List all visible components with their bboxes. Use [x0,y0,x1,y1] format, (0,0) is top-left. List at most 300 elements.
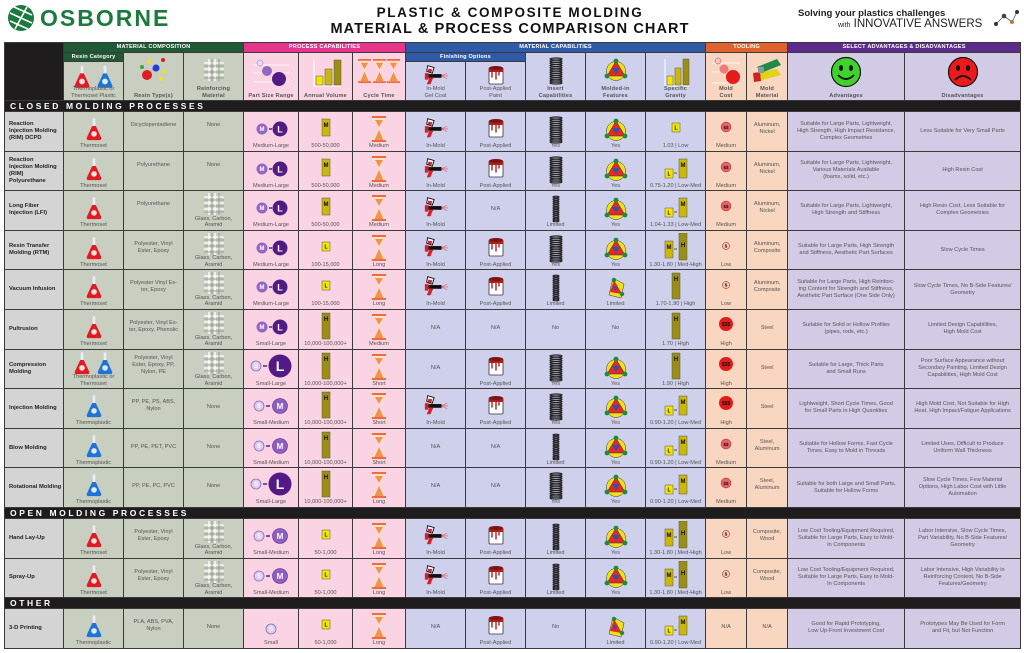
row: Spray-Up: Yes [611,590,620,596]
row: LFI: High Resin Cost, Less Suitable for [920,203,1005,209]
row: Blow Molding: Limited Uses, Difficult to Produce [921,441,1004,447]
row: Rotational Molding: Slow Cycle Times, Few Material [923,477,1002,483]
row: Vacuum Infusion: Medium-Large [253,301,289,307]
header band: Specific [664,86,687,92]
row: Spray-Up: Polyester, Vinyl [134,569,173,575]
row: Blow Molding: Yes [611,460,620,466]
row: 3-D Printing: No [552,624,559,630]
row: Pultrusion: Steel [761,325,773,331]
row: Compression Molding: Small-Large [256,381,286,387]
row: Pultrusion: Suitable for Solid or Hollow Profiles [802,322,890,328]
row: Rotational Molding: Rotational Molding [9,484,61,490]
row: Vacuum Infusion: Thermoset [80,301,107,307]
row: RTM: Medium-Large [253,262,289,268]
row: Blow Molding: 0.90-1.20 | Low-Med [650,460,701,466]
row: Blow Molding: Times, Easy to Mold in Threads [807,448,885,454]
row: RIM DCPD: Suitable for Large Parts, Lightweight, [800,121,892,127]
row: Vacuum Infusion: Geometry [950,290,975,296]
row: Vacuum Infusion: Aluminum, [754,280,780,286]
row: Blow Molding [5,429,1020,467]
row: Blow Molding: None [207,444,220,450]
row: RTM: and Stiffness, Aesthetic Part Surfaces [799,250,893,256]
header sub band: Resin Category [72,54,115,60]
row: Pultrusion: Glass, Carbon, [195,335,232,341]
row: RTM: Resin Transfer [9,243,49,249]
row: RIM DCPD: Medium [369,143,389,149]
row: Injection Molding: PP, PE, PS, ABS, [132,399,175,405]
row: RIM Polyurethane: Thermoset [80,183,107,189]
row: RTM: Suitable for Large Parts, High Strength [798,243,894,249]
row: Rotational Molding: None [207,483,220,489]
row: LFI: Polyurethane [137,201,170,207]
row: 3-D Printing: Thermoplastic [76,640,111,646]
row: Compression Molding: Poor Surface Appearance without [921,358,1004,364]
row: 3-D Printing: Small [264,640,278,646]
row: Injection Molding: Yes [551,420,560,426]
row: Rotational Molding: 0.90-1.20 | Low-Med [650,499,701,505]
row: 3-D Printing: 3-D Printing [9,625,42,631]
row: LFI: Thermoset [80,222,107,228]
header band: Material [756,92,778,98]
row: LFI: 500-50,000 [311,222,340,228]
row: 3-D Printing: Nylon [146,626,161,632]
header band: Material [202,92,225,98]
row: Hand Lay-Up: Glass, Carbon, [195,544,232,550]
row: LFI: Medium-Large [253,222,289,228]
row: Vacuum Infusion: In-Mold [426,301,445,307]
row: 3-D Printing: Low Up-Front Investment Cost [808,628,884,634]
row: LFI: Nickel [759,208,775,214]
row: Blow Molding: Aluminum [755,446,780,452]
row: Pultrusion: ter, Epoxy, Phenolic [129,327,178,333]
row: RIM Polyurethane: Reaction [9,157,33,163]
row: RTM: Aramid [205,262,222,268]
row: Compression Molding: 1.90 | High [662,381,689,387]
header band: Cycle Time [363,92,395,98]
row: RIM Polyurethane: None [207,162,220,168]
row: Hand Lay-Up: Low [721,550,731,556]
row: 3-D Printing: and Fit, but Not Function [932,628,993,634]
row: Injection Molding [5,389,1020,428]
row: LFI: 1.04-1.33 | Low-Med [650,222,701,228]
row: 3-D Printing: N/A [431,624,440,630]
row: Injection Molding: Steel [761,404,773,410]
title: MATERIAL & PROCESS COMPARISON CHART [330,21,690,37]
row: LFI: Complex Geometries [936,210,989,216]
header icons row: Post-Applied [480,86,511,92]
row: Pultrusion: N/A [431,325,440,331]
row: Compression Molding: Thermoplastic or [73,374,114,380]
row: LFI: Yes [611,222,620,228]
row: Spray-Up: Long [373,590,385,596]
row: LFI: Suitable for Large Parts, Lightweight, [800,203,892,209]
row: Injection Molding: In-Mold [426,420,445,426]
row: Vacuum Infusion: Limited [606,301,625,307]
row: Spray-Up: Features/Geometry [938,581,987,587]
row: Rotational Molding: Steel, [760,478,774,484]
row: Pultrusion: No [552,325,559,331]
row: Rotational Molding: Yes [611,499,620,505]
section: open molding: OPEN MOLDING PROCESSES [10,508,189,518]
row: Hand Lay-Up: Wood [760,536,774,542]
row: Vacuum Infusion: 1.70-1.90 | High [656,301,695,307]
row: Spray-Up: Ester, Epoxy [138,576,169,582]
row: Spray-Up: Small-Medium [253,590,289,596]
row: RIM DCPD: Yes [611,143,620,149]
row: Compression Molding: Polyester, Vinyl [134,355,173,361]
row: RTM: Polyester, Vinyl [134,241,173,247]
row: 3-D Printing: Good for Rapid Prototyping, [811,621,881,627]
row: RIM Polyurethane: Yes [611,183,620,189]
row: Rotational Molding: Suitable for Hollow Forms [814,488,878,494]
row: Vacuum Infusion: Vacuum Infusion [9,286,55,292]
header band: Capabilities [539,92,572,98]
row: RIM Polyurethane: 0.75-1.20 | Low-Med [650,183,701,189]
row: Hand Lay-Up: Polyester, Vinyl [134,529,173,535]
row: Rotational Molding: N/A [491,483,500,489]
row: Spray-Up: Aramid [205,590,222,596]
header icons row: In-Mold [426,86,445,92]
row: Spray-Up [5,559,1020,597]
row: Pultrusion: 10,000-100,000+ [304,341,347,347]
row: Hand Lay-Up: Long [373,550,385,556]
header band: Part Size Range [248,92,294,98]
row: Pultrusion: 1.70 | High [662,341,689,347]
row: Compression Molding: Yes [551,381,560,387]
header icons row: Thermoset Plastic [71,92,116,98]
header icons row: Gel Coat [424,92,447,98]
row: RIM DCPD: Nickel [759,129,775,135]
row: Spray-Up: Post-Applied [480,590,511,596]
row: RIM DCPD: Post-Applied [480,143,511,149]
header band: Cost [719,92,733,98]
row: Injection Molding: Lightweight, Short Cycle Times, Good [799,401,893,407]
header band: Gravity [665,92,686,98]
row: LFI [5,191,1020,230]
row: RTM: Slow Cycle Times [940,247,985,253]
row: Vacuum Infusion: Aramid [205,301,222,307]
header band: Disadvantages [942,92,984,98]
row: LFI: High Strength and Stiffness [812,210,880,216]
row: RTM: Long [373,262,385,268]
row: RIM Polyurethane: Medium [369,183,389,189]
header band: Mold [760,86,774,92]
row: Vacuum Infusion: Suitable for Large Parts, High Reinforc- [797,279,895,285]
row: Compression Molding: Steel [761,365,773,371]
row: LFI: N/A [491,206,500,212]
row: Blow Molding: Suitable for Hollow Forms, Fast Cycle [799,441,893,447]
row: Spray-Up: Spray-Up [9,574,35,580]
row: RTM: Molding (RTM) [9,250,49,256]
row: 3-D Printing: N/A [762,624,772,630]
row: RIM Polyurethane: Polyurethane [9,178,46,184]
row: Vacuum Infusion: Long [373,301,385,307]
row: LFI: Aluminum, [754,201,780,207]
row: RIM DCPD: 500-50,000 [311,143,340,149]
row: Hand Lay-Up: Hand Lay-Up [9,535,45,541]
row: Vacuum Infusion: Polyester Vinyl Es- [130,280,177,286]
row: RIM DCPD: Thermoset [80,143,107,149]
row: Compression Molding: Yes [611,381,620,387]
row: RIM DCPD: Dicyclopentadiene [131,122,176,128]
section: closed molding: CLOSED MOLDING PROCESSES [10,101,206,111]
row: Injection Molding: 0.90-1.20 | Low-Med [650,420,701,426]
row: Hand Lay-Up: 1.30-1.80 | Med-High [649,550,702,556]
row: Compression Molding: Capabilities, High Mold Cost [927,372,998,378]
row: Vacuum Infusion [5,270,1020,309]
title [330,5,690,37]
row: Compression Molding [5,350,1020,388]
row: Pultrusion: High [720,341,732,347]
row: Rotational Molding: Options, High Labor Cost with Little [919,484,1006,490]
tagline [798,8,1019,30]
row: RIM Polyurethane: Suitable for Large Parts, Lightweight, [800,160,892,166]
row: Rotational Molding: Thermoplastic [76,499,111,505]
row: 3-D Printing: Long [373,640,385,646]
row: Spray-Up: Low [721,590,731,596]
row: Rotational Molding: PP, PE, PC, PVC [132,483,175,489]
row: RIM Polyurethane: Yes [551,183,560,189]
row: Vacuum Infusion: Limited [546,301,565,307]
row: Hand Lay-Up: Geometry [950,542,975,548]
row: Blow Molding: Medium [716,460,736,466]
header band: Insert [547,86,564,92]
row: Compression Molding: Post-Applied [480,381,511,387]
row: LFI: In-Mold [426,222,445,228]
row: Blow Molding: N/A [491,444,500,450]
header sub band [64,53,1020,100]
row: Rotational Molding: N/A [431,483,440,489]
row: RIM Polyurethane: Medium-Large [253,183,289,189]
row: 3-D Printing: N/A [721,624,731,630]
row: Compression Molding: High [720,381,732,387]
row: Pultrusion: Thermoset [80,341,107,347]
header band: Mold [719,86,733,92]
row: Hand Lay-Up: Composite, [753,529,781,535]
row: Hand Lay-Up [5,519,1020,558]
row: Hand Lay-Up: Limited [546,550,565,556]
row: Compression Molding: Compression [9,362,46,368]
row: Injection Molding: High [720,420,732,426]
row: RIM DCPD [5,112,1020,151]
header band: Annual Volume [304,92,347,98]
row: Vacuum Infusion: Composite [754,287,780,293]
header band: Resin Type(s) [134,92,173,98]
row: Rotational Molding: Small-Large [256,499,286,505]
row: Compression Molding: Glass, Carbon, [195,374,232,380]
row: 3-D Printing: Prototypes May Be Used for Form [920,621,1005,627]
row: RTM: Low [721,262,731,268]
row: RIM DCPD: Less Suitable for Very Small Parts [920,128,1005,134]
row: RIM Polyurethane: Medium [716,183,736,189]
row: Spray-Up: Limited [546,590,565,596]
header band: SELECT ADVANTAGES & DISADVANTAGES [842,44,966,50]
tagline: Solving your plastics challenges [798,8,945,19]
header sub band: Finishing Options [440,54,491,60]
row: Vacuum Infusion: Post-Applied [480,301,511,307]
title: PLASTIC & COMPOSITE MOLDING [377,5,643,20]
row: Spray-Up: 1.30-1.80 | Med-High [649,590,702,596]
row: Injection Molding: Short [372,420,386,426]
row: RIM DCPD: Aluminum, [754,122,780,128]
row: Injection Molding: Thermoplastic [76,420,111,426]
header band: TOOLING [733,44,760,50]
row: Pultrusion: Polyester, Vinyl Es- [129,320,178,326]
row: LFI: Glass, Carbon, [195,216,232,222]
row: Blow Molding: 10,000-100,000+ [304,460,347,466]
row: Injection Molding: Nylon [146,406,161,412]
row: Blow Molding: Limited [546,460,565,466]
row: Injection Molding: Yes [611,420,620,426]
row: Hand Lay-Up: In-Mold [426,550,445,556]
row: RIM DCPD: 1.03 | Low [663,143,688,149]
row: Compression Molding: and Small Runs [826,369,866,375]
row: Compression Molding: N/A [431,365,440,371]
row: RIM Polyurethane: (foams, solid, etc.) [823,174,869,180]
row: Pultrusion: No [612,325,619,331]
header icons row: Thermoplastic or [73,86,114,92]
row: RTM: Yes [551,262,560,268]
header band: Features [603,92,628,98]
row: Injection Molding: for Small Parts in High Quantities [805,408,887,414]
row: Pultrusion: Small-Large [256,341,286,347]
row: RTM: 100-15,000 [311,262,340,268]
row: Injection Molding: None [207,404,220,410]
row: RTM: 1.30-1.80 | Med-High [649,262,702,268]
logo: OSBORNE [40,5,170,31]
row: Compression Molding: Ester, Epoxy, PP, [132,362,175,368]
row: RIM Polyurethane: In-Mold [426,183,445,189]
row: Compression Molding: Secondary Painting, Limited Design [918,365,1007,371]
row: Pultrusion: High Mold Cost [943,329,982,335]
row: Hand Lay-Up: Low Cost Tooling/Equipment Required, [798,528,894,534]
row: Spray-Up: Composite, [753,569,781,575]
row: RIM DCPD: (RIM) DCPD [9,135,42,141]
row: 3-D Printing: Post-Applied [480,640,511,646]
row: RTM: Glass, Carbon, [195,255,232,261]
row: RIM Polyurethane: High Resin Cost [942,167,983,173]
row: Blow Molding: Steel, [760,439,774,445]
row: RIM DCPD: None [207,122,220,128]
row: Hand Lay-Up: In Components [827,542,865,548]
row: RIM DCPD: Medium [716,143,736,149]
row: Blow Molding: Uniform Wall Thickness [933,448,992,454]
row: Spray-Up: Wood [760,576,774,582]
row: Vacuum Infusion: Aesthetic Part Surface (One Side Only) [797,293,895,299]
row: Rotational Molding: Suitable for both Large and Small Parts, [796,481,896,487]
row: LFI: Long Fiber [9,203,39,209]
row: RIM Polyurethane: Polyurethane [137,162,170,168]
row: Spray-Up: 50-1,000 [314,590,337,596]
header band: Reinforcing [197,86,230,92]
row: Spray-Up: Low Cost Tooling/Equipment Required, [798,567,894,573]
row: Rotational Molding: Automation [948,491,977,497]
row: RIM Polyurethane: 500-50,000 [311,183,340,189]
row: RIM DCPD: Yes [551,143,560,149]
row: Pultrusion: Pultrusion [9,326,38,332]
row: Compression Molding: Nylon, PE [141,369,166,375]
row: Pultrusion: Medium [369,341,389,347]
row: Injection Molding: High Mold Cost, Not Suitable for High [916,401,1009,407]
row: Hand Lay-Up: Suitable for Large Parts, Easy to Mold- [798,535,894,541]
row: RIM DCPD: Injection Molding [9,128,57,134]
row: Injection Molding: Injection Molding [9,405,57,411]
row: Compression Molding: Thermoset [80,381,107,387]
row: Rotational Molding [5,468,1020,507]
row: Hand Lay-Up: 50-1,000 [314,550,337,556]
row: 3-D Printing: Limited [606,640,625,646]
row: Vacuum Infusion: Low [721,301,731,307]
row: 3-D Printing: 0.90-1.20 | Low-Med [650,640,701,646]
row: 3-D Printing [5,609,1020,648]
row: LFI: Limited [546,222,565,228]
row: Rotational Molding: Medium [716,499,736,505]
row: Spray-Up: In-Mold [426,590,445,596]
row: Rotational Molding: Yes [551,499,560,505]
row: Vacuum Infusion: Glass, Carbon, [195,295,232,301]
row: Blow Molding: Thermoplastic [76,460,111,466]
row: Spray-Up: Suitable for Large Parts, Easy to Mold- [798,574,894,580]
row: Pultrusion: Limited Design Capabilities, [928,322,997,328]
row: Spray-Up: Thermoset [80,590,107,596]
row: RIM DCPD: Reaction [9,121,33,127]
row: RTM: Aluminum, [754,241,780,247]
row: RIM Polyurethane: Various Materials Available [813,167,879,173]
row: RIM Polyurethane: Injection Molding [9,164,57,170]
row: RIM DCPD: In-Mold [426,143,445,149]
row: Vacuum Infusion: ing Content for Strength and Stiffness, [799,286,893,292]
row: Injection Molding: 10,000-100,000+ [304,420,347,426]
row: Blow Molding: Short [372,460,386,466]
row: Hand Lay-Up: Small-Medium [253,550,289,556]
row: Compression Molding: Aramid [205,381,222,387]
row: LFI: Medium [716,222,736,228]
row: RIM Polyurethane: Aluminum, [754,162,780,168]
row: Pultrusion: N/A [491,325,500,331]
row: Blow Molding: N/A [431,444,440,450]
row: Compression Molding: Short [372,381,386,387]
row: RTM: In-Mold [426,262,445,268]
header band: MATERIAL COMPOSITION [117,44,190,50]
row: RTM [5,231,1020,269]
row: Blow Molding: Small-Medium [253,460,289,466]
section: other: OTHER [10,598,53,608]
row: Pultrusion: (pipes, rods, etc.) [824,329,868,335]
row: Rotational Molding: Aluminum [755,485,780,491]
row: Spray-Up: Reinforcing Content, No B-Side [924,574,1002,580]
row: Hand Lay-Up: Ester, Epoxy [138,536,169,542]
row: RIM Polyurethane [5,152,1020,190]
row: 3-D Printing: None [207,624,220,630]
row: RTM: Ester, Epoxy [138,248,169,254]
row: RTM: Post-Applied [480,262,511,268]
header band: Molded-in [601,86,630,92]
row: Blow Molding: Blow Molding [9,445,47,451]
row: Compression Molding: 10,000-100,000+ [304,381,347,387]
row: Spray-Up: In Components [827,581,865,587]
tagline: with INNOVATIVE ANSWERS [838,18,982,30]
row: RTM: Yes [611,262,620,268]
header icons row: Paint [489,92,502,98]
row: Spray-Up: Labor Intensive, High Variability in [920,567,1005,573]
row: LFI: Medium [369,222,389,228]
row: Injection Molding: Small-Medium [253,420,289,426]
row: Rotational Molding: Long [373,499,385,505]
row: Vacuum Infusion: ter, Epoxy [141,287,166,293]
row: Compression Molding: Suitable for Large, Thick Parts [808,362,884,368]
row: 3-D Printing: 50-1,000 [314,640,337,646]
header band: PROCESS CAPABILITIES [289,44,360,50]
